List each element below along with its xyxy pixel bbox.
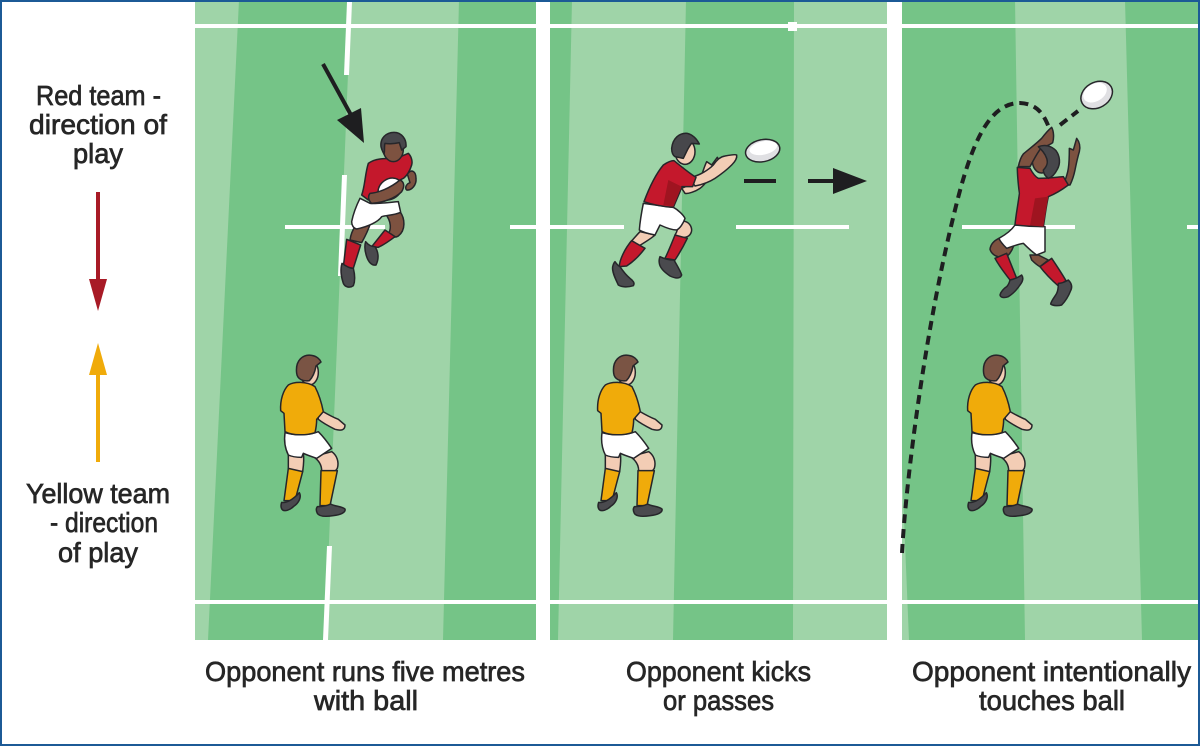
player: yellow defender, panel 3	[968, 355, 1032, 516]
legend heading: red team direction: Red team -	[36, 80, 161, 111]
panel: opponent intentionally touches ball	[902, 0, 1200, 640]
legend heading: yellow team direction	[26, 478, 170, 568]
arrow: towards running player	[323, 64, 364, 143]
player: yellow defender, panel 1	[281, 355, 345, 516]
player: red passer	[613, 133, 737, 287]
caption: panel 3: touches ball	[979, 685, 1125, 716]
panel: opponent runs five metres with ball	[195, 0, 536, 640]
player: red runner with ball	[341, 132, 416, 287]
caption: panel 3: Opponent intentionally	[912, 656, 1191, 687]
arrow: direction of pass	[808, 168, 867, 194]
caption: panel 2: or passes	[663, 685, 774, 716]
player: yellow defender, panel 2	[598, 355, 662, 516]
arrow: yellow team direction	[89, 343, 107, 462]
dashed ball path	[902, 103, 1078, 553]
player: red jumping to touch ball	[990, 127, 1080, 306]
pass marker dash	[744, 179, 776, 183]
caption: panel 1: with ball	[313, 685, 418, 716]
legend heading: yellow team direction: - direction	[50, 507, 158, 538]
icon: ball in flight, panel 2	[743, 136, 782, 165]
caption: panel 1: Opponent runs five metres	[205, 656, 525, 687]
legend heading: yellow team direction: Yellow team	[26, 478, 170, 509]
legend heading: yellow team direction: of play	[58, 537, 138, 568]
caption: panel 1	[205, 656, 525, 716]
legend heading: red team direction	[29, 80, 167, 169]
caption: panel 3	[912, 656, 1191, 716]
caption: panel 2: Opponent kicks	[626, 656, 811, 687]
panel: opponent kicks or passes	[550, 0, 887, 640]
legend heading: red team direction: play	[73, 138, 123, 169]
icon: ball in flight, panel 3	[1076, 76, 1117, 114]
caption: panel 2	[626, 656, 811, 716]
arrow: red team direction	[89, 192, 107, 311]
legend heading: red team direction: direction of	[29, 109, 167, 140]
